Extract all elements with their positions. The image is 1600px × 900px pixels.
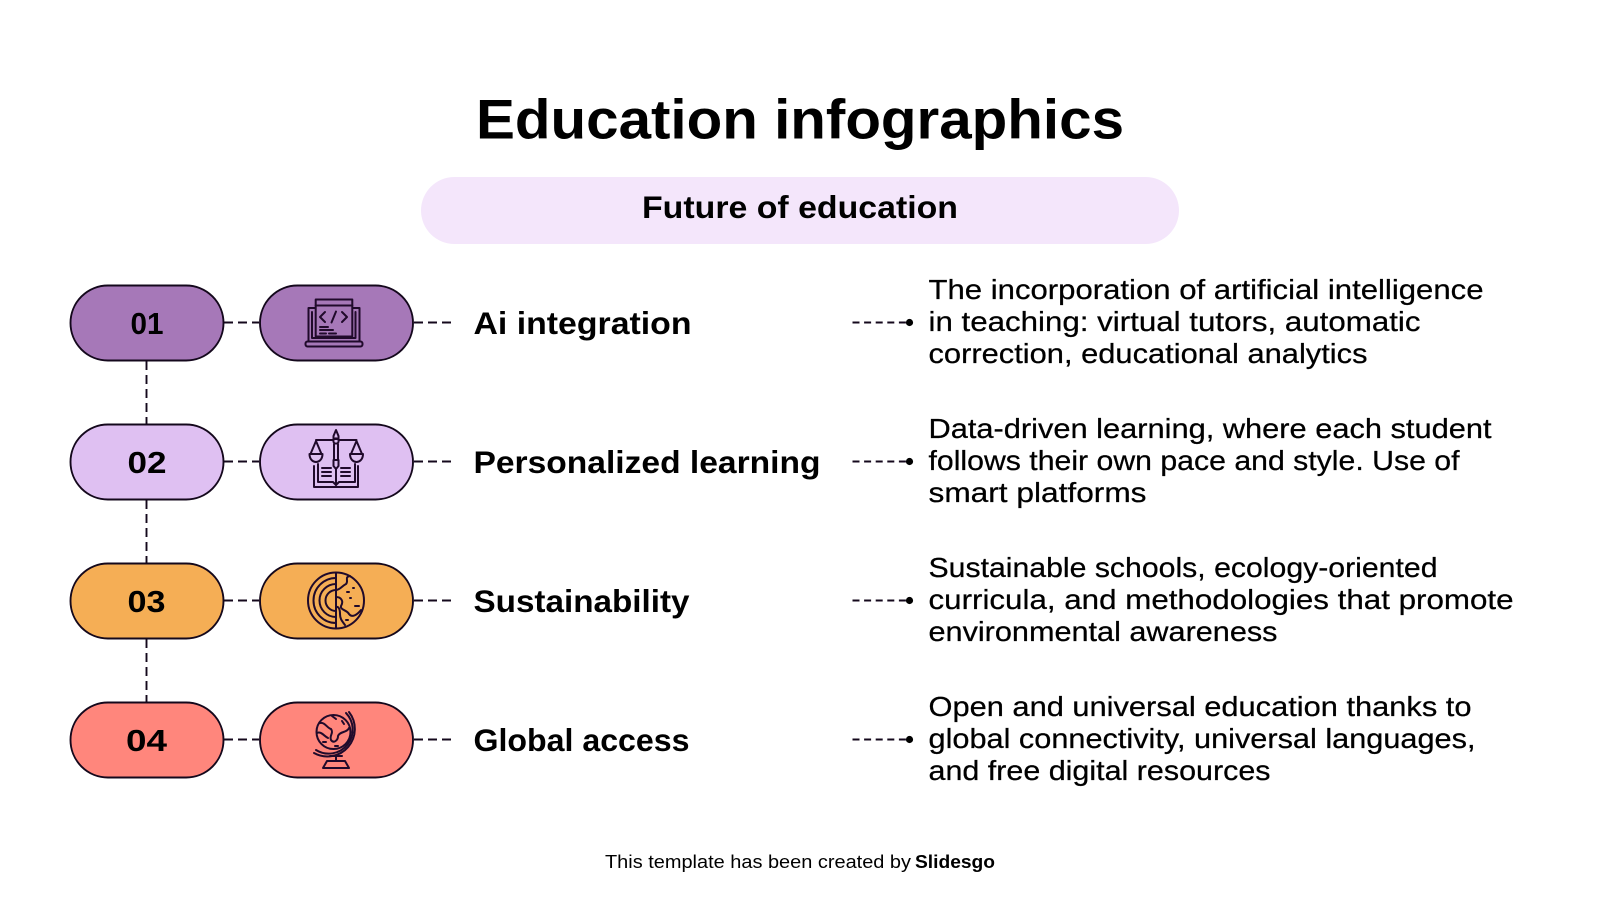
description: global connectivity, universal languages, [928, 723, 1476, 754]
footer credit: Slidesgo [915, 852, 995, 872]
description [928, 413, 1492, 508]
description: Sustainable schools, ecology-oriented [928, 552, 1438, 583]
footer credit: This template has been created by [605, 852, 911, 872]
number pill 04: 04 [126, 723, 168, 758]
number pill 02 [70, 424, 224, 500]
description [928, 552, 1514, 647]
number pill 01: 01 [130, 306, 164, 341]
description: smart platforms [928, 477, 1146, 508]
description: and free digital resources [928, 755, 1270, 786]
row 3: Sustainability [70, 552, 1514, 647]
description: follows their own pace and style. Use of [928, 445, 1460, 476]
description: correction, educational analytics [928, 338, 1368, 369]
number pill 04 [70, 702, 224, 778]
description: curricula, and methodologies that promote [928, 584, 1514, 615]
icon pill: half rings half earth [260, 564, 413, 638]
number pill 02: 02 [128, 445, 166, 480]
number pill 03 [70, 564, 224, 638]
description [928, 691, 1476, 786]
icon pill: laptop with code [260, 286, 413, 360]
description: The incorporation of artificial intelligence [928, 274, 1484, 305]
number pill 01 [70, 286, 224, 360]
description [928, 274, 1484, 369]
label: Personalized learning [474, 444, 820, 480]
label: Global access [474, 722, 690, 758]
row 2: Personalized learning [70, 413, 1492, 508]
description: in teaching: virtual tutors, automatic [928, 306, 1421, 337]
label: Sustainability [474, 583, 690, 619]
number pill 03: 03 [128, 584, 166, 619]
icon pill: scales and book [260, 424, 413, 500]
icon pill: desk globe [260, 702, 413, 778]
subtitle banner [421, 177, 1179, 244]
label: Ai integration [474, 305, 692, 341]
title: Education infographics [476, 88, 1124, 150]
description: environmental awareness [928, 616, 1278, 647]
row 1: Ai integration [70, 274, 1484, 369]
description: Open and universal education thanks to [928, 691, 1472, 722]
description: Data-driven learning, where each student [928, 413, 1492, 444]
vertical connector lines [146, 361, 148, 702]
row 4: Global access [70, 691, 1476, 786]
subtitle banner: Future of education [642, 189, 958, 225]
